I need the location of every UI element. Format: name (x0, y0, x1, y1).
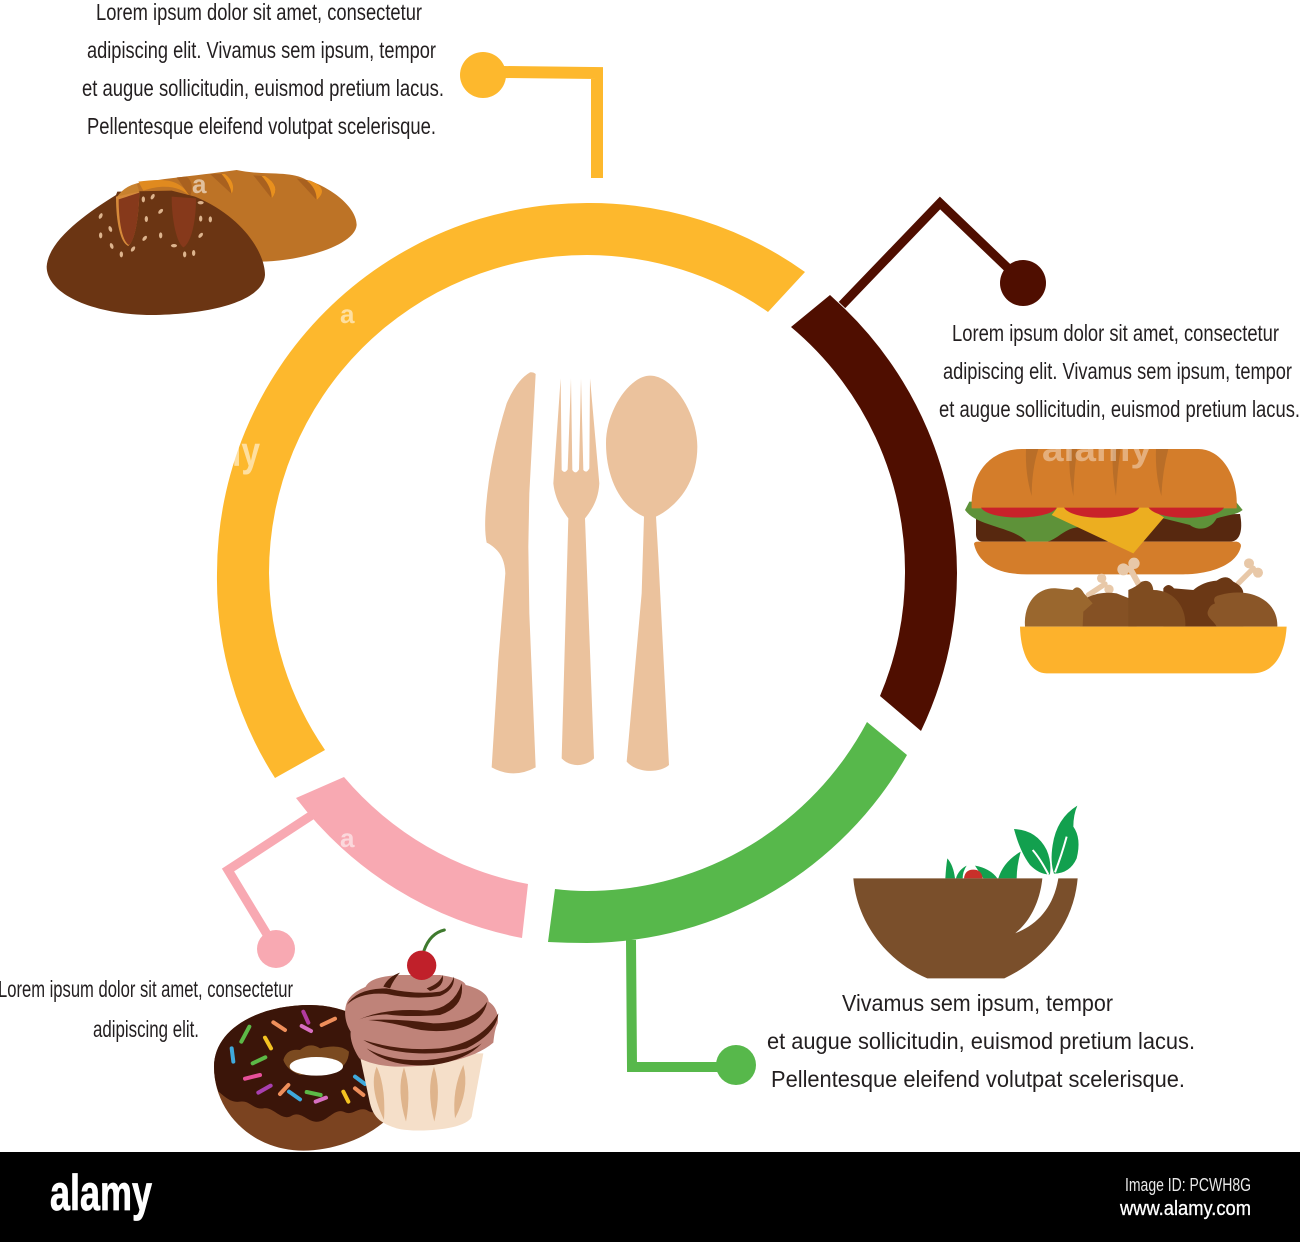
cherry (407, 951, 436, 980)
wrapper (359, 1053, 483, 1131)
footer logo: alamy (50, 1165, 152, 1221)
knife (485, 372, 536, 773)
text block: bottom left: adipiscing elit. (93, 1016, 199, 1042)
icon: bread (47, 170, 357, 315)
connector: brown (842, 203, 1046, 306)
footer image id: Image ID: PCWH8G (1125, 1175, 1251, 1195)
watermark glyphs (192, 169, 1152, 853)
text block: bottom right: Pellentesque eleifend volutpat scelerisque. (771, 1066, 1185, 1092)
tomato (964, 870, 983, 878)
spoon (606, 376, 697, 771)
watermark glyphs: ly (232, 428, 261, 475)
connector: green (631, 940, 756, 1085)
chocolate swirls (347, 973, 498, 1065)
ring segment: pink (296, 777, 528, 938)
icon: cupcake (345, 930, 498, 1131)
sprinkles (232, 1012, 365, 1102)
footer url: www.alamy.com (1119, 1198, 1251, 1220)
ring segment: green (548, 722, 907, 943)
connector: pink (228, 815, 312, 968)
greens (945, 806, 1079, 878)
text block: bottom left (0, 976, 293, 1042)
sesame seeds (98, 193, 212, 257)
text block: top left: et augue sollicitudin, euismod pretium lacus. (82, 75, 444, 101)
bowl (853, 878, 1078, 978)
ring segment: yellow (217, 203, 805, 778)
frosting (345, 975, 498, 1067)
ring segment: brown (791, 295, 957, 731)
footer bar (0, 1152, 1300, 1242)
text block: top left: adipiscing elit. Vivamus sem ipsum, tempor (87, 37, 436, 63)
icon: salad bowl (853, 806, 1079, 978)
watermark glyphs: a (340, 299, 355, 329)
text block: bottom right (767, 990, 1195, 1092)
text block: right (939, 320, 1300, 422)
text block: bottom right: Vivamus sem ipsum, tempor (842, 990, 1113, 1016)
donut hole (283, 1045, 349, 1075)
connector: yellow (460, 52, 597, 178)
watermark glyphs: a (192, 169, 207, 199)
watermark glyphs: a (340, 823, 355, 853)
text block: top left: Pellentesque eleifend volutpat scelerisque. (87, 113, 436, 139)
icon: donut (214, 1005, 407, 1151)
text block: top left (82, 0, 444, 139)
back loaf (130, 170, 357, 262)
chicken (1020, 558, 1287, 673)
fork (553, 378, 599, 765)
burger (965, 449, 1243, 574)
icon: cutlery (485, 372, 697, 773)
text block: bottom right: et augue sollicitudin, euismod pretium lacus. (767, 1028, 1195, 1054)
chocolate glaze (214, 1005, 400, 1122)
front bun (47, 191, 265, 315)
icon: burger and chicken (965, 449, 1287, 673)
cherry stem (424, 930, 444, 951)
watermark glyphs: alamy (1042, 428, 1152, 469)
text block: bottom left: Lorem ipsum dolor sit amet, consectetur (0, 976, 293, 1002)
